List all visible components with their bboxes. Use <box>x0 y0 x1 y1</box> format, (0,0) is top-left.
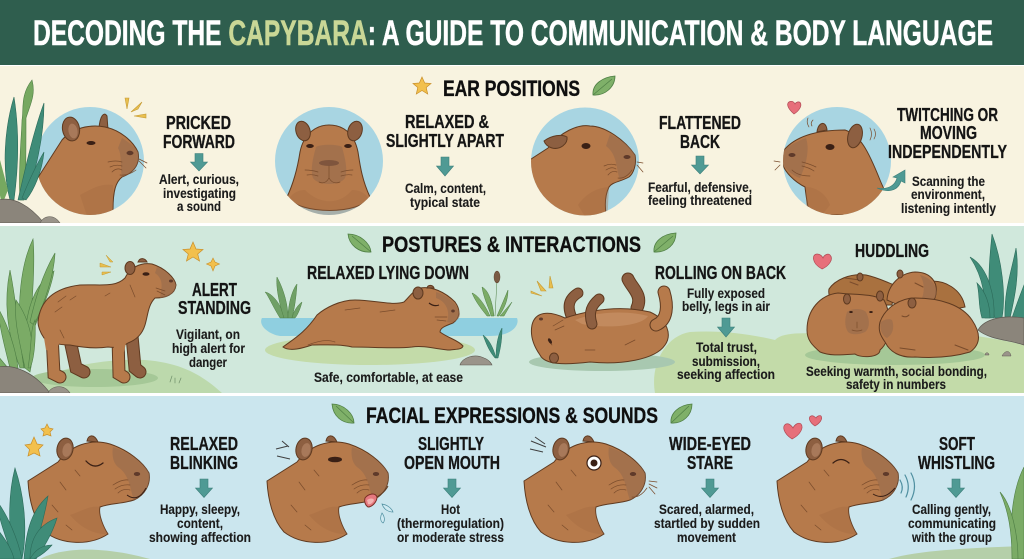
label: SLIGHTLY <box>418 433 484 454</box>
description <box>648 180 752 208</box>
description: or moderate stress <box>397 530 504 545</box>
label: FLATTENED <box>659 112 741 133</box>
label: SLIGHTLY APART <box>386 130 505 151</box>
scene: huddling <box>805 234 1024 365</box>
label: relaxed lying down: RELAXED LYING DOWN <box>307 262 469 283</box>
item: relaxed and slightly apart <box>275 107 505 225</box>
item: pricked forward <box>0 80 239 225</box>
arrow <box>196 479 212 498</box>
label <box>918 433 995 473</box>
icon: leaf right <box>654 233 676 252</box>
marks <box>276 441 290 459</box>
scene: relaxed lying down <box>261 271 518 365</box>
arrow <box>190 154 208 171</box>
description: showing affection <box>149 530 251 545</box>
description <box>405 181 486 210</box>
capybara standing <box>38 259 176 377</box>
label: BACK <box>680 131 720 152</box>
description: with the group <box>911 530 992 545</box>
heading: ear positions: EAR POSITIONS <box>443 76 580 101</box>
plant <box>0 468 57 559</box>
label: alert standing: ALERT <box>192 279 238 300</box>
description: lying: Safe, comfortable, at ease <box>314 370 463 385</box>
description: Alert, curious, <box>159 172 239 187</box>
marks <box>530 437 546 452</box>
item: soft whistling <box>777 416 1024 559</box>
droplets <box>381 504 393 523</box>
icon: star <box>183 242 203 261</box>
plant <box>970 234 1024 318</box>
description: rolling bottom <box>677 340 775 382</box>
heading: postures and interactions: POSTURES & INTERACTIONS <box>382 232 641 257</box>
description <box>397 502 504 545</box>
description: rolling top: Fully exposed <box>687 286 765 301</box>
arrow <box>948 479 964 498</box>
item: wide-eyed stare <box>524 433 760 545</box>
label: BLINKING <box>170 452 238 473</box>
label <box>669 433 751 473</box>
marks <box>125 98 146 118</box>
arrow <box>702 479 718 498</box>
icon: leaf <box>593 76 615 95</box>
label: huddling: HUDDLING <box>855 240 929 261</box>
header banner <box>0 0 1024 65</box>
description: communicating <box>908 516 996 531</box>
label: MOVING <box>920 122 977 143</box>
icon: leaf left <box>348 234 371 252</box>
item: twitching or moving independently <box>774 101 1008 220</box>
description: Happy, sleepy, <box>160 502 240 517</box>
label: STARE <box>687 452 733 473</box>
panel: postures and interactions <box>0 226 1024 393</box>
icon: sparkle <box>206 258 220 271</box>
description <box>159 172 239 214</box>
label: WHISTLING <box>918 452 995 473</box>
description: feeling threatened <box>648 193 752 208</box>
plant right: cattail <box>472 271 512 316</box>
arrow <box>692 156 708 174</box>
label: RELAXED <box>170 433 238 454</box>
description: rolling top <box>682 286 771 314</box>
label: SOFT <box>939 433 976 454</box>
label: rolling on back: ROLLING ON BACK <box>655 262 786 283</box>
description: content, <box>177 516 223 531</box>
description: huddling <box>806 364 987 392</box>
description: rolling top: belly, legs in air <box>682 299 771 314</box>
description: (thermoregulation) <box>397 516 504 531</box>
description: startled by sudden <box>654 516 760 531</box>
plant and rock: left <box>0 80 60 223</box>
description <box>908 502 996 545</box>
panel: ear positions <box>0 66 1024 225</box>
label: OPEN MOUTH <box>404 452 500 473</box>
arrow: curved <box>877 170 905 191</box>
description: huddling: safety in numbers <box>846 377 946 392</box>
description: a sound <box>177 199 221 214</box>
icon: heart <box>788 101 801 114</box>
capybara lying <box>283 288 463 350</box>
item: flattened back <box>531 108 752 216</box>
rock <box>0 366 50 393</box>
label <box>659 112 741 152</box>
description: Scared, alarmed, <box>659 502 754 517</box>
description: investigating <box>163 186 236 201</box>
description: Calm, content, <box>405 181 486 196</box>
label: FORWARD <box>163 131 235 152</box>
marks <box>531 276 553 296</box>
ground: bottom right <box>889 546 1012 559</box>
label <box>163 112 235 152</box>
icon: leaf left <box>332 404 354 423</box>
panel: facial expressions and sounds <box>0 396 1024 559</box>
marks <box>100 255 113 275</box>
arrow <box>436 157 454 176</box>
description <box>654 502 760 545</box>
plant <box>0 239 55 372</box>
label: RELAXED & <box>405 111 489 132</box>
description: Scanning the <box>912 174 985 189</box>
ground: bottom left <box>40 550 150 559</box>
description: alert standing <box>172 327 246 370</box>
description: alert standing: high alert for <box>172 341 246 356</box>
label <box>386 111 505 151</box>
label: alert standing: STANDING <box>178 297 251 318</box>
description: Calling gently, <box>912 502 991 517</box>
description: listening intently <box>901 201 996 216</box>
scene: rolling on back <box>529 276 675 371</box>
description: alert standing: Vigilant, on <box>176 327 240 342</box>
plant left <box>265 277 302 318</box>
description: Fearful, defensive, <box>648 180 752 195</box>
arrow <box>444 479 460 498</box>
label <box>888 104 1008 162</box>
label <box>170 433 238 473</box>
item: relaxed blinking <box>0 424 251 559</box>
description <box>149 502 251 545</box>
description: Hot <box>441 502 460 517</box>
icon: star <box>413 77 431 94</box>
description: typical state <box>410 195 480 210</box>
ground: right side <box>654 329 1024 393</box>
label <box>404 433 500 473</box>
description: movement <box>677 530 736 545</box>
heading: facial expressions and sounds: FACIAL EXPRESSIONS & SOUNDS <box>366 403 658 428</box>
icon: leaf right <box>671 404 692 423</box>
icon: heart <box>813 254 831 269</box>
item: slightly open mouth <box>267 433 504 545</box>
description: rolling bottom: submission, <box>692 354 760 369</box>
description <box>901 174 996 216</box>
description: huddling: Seeking warmth, social bonding, <box>806 364 987 379</box>
label: alert standing <box>178 279 251 318</box>
arrow <box>718 318 734 337</box>
description: rolling bottom: seeking affection <box>677 367 775 382</box>
rock <box>978 317 1024 345</box>
label: WIDE-EYED <box>669 433 751 454</box>
label: PRICKED <box>166 112 231 133</box>
icon: stars <box>25 424 53 456</box>
icon: sound waves <box>900 473 914 500</box>
icon: hearts <box>784 416 822 439</box>
plant: bottom right <box>1000 467 1024 559</box>
description: alert standing: danger <box>189 355 228 370</box>
description: environment, <box>911 187 985 202</box>
description: rolling bottom: Total trust, <box>696 340 757 355</box>
scene: alert standing <box>0 239 222 393</box>
